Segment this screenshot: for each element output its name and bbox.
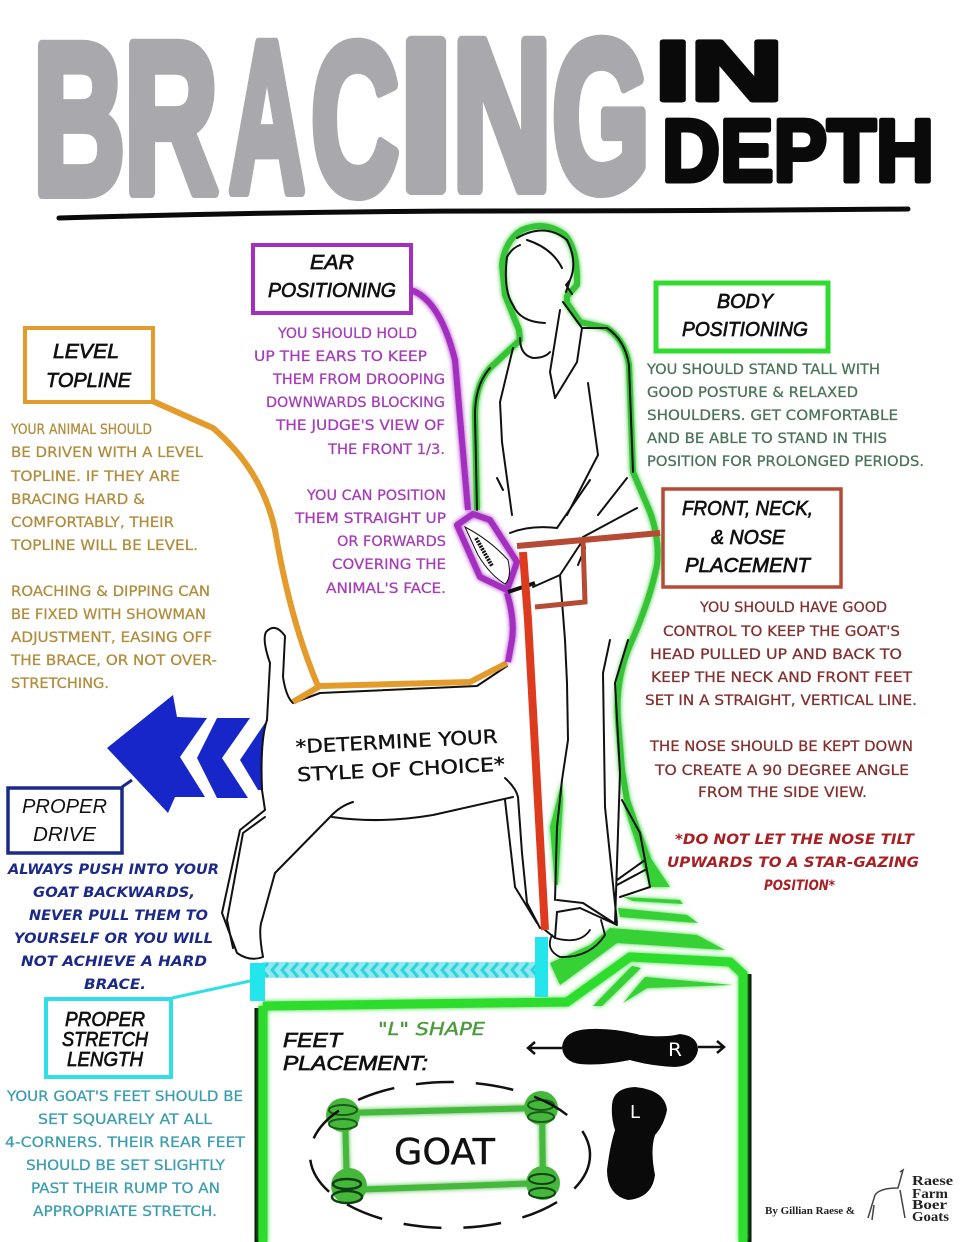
front right foot [524,1091,558,1125]
ear positioning heading box: POSITIONING [268,280,396,302]
head and hair [506,230,573,323]
level topline text: BE DRIVEN WITH A LEVEL [11,445,203,461]
front neck nose text: KEEP THE NECK AND FRONT FEET [651,670,912,686]
logo: Raese Farm Boer Goats: Farm [912,1187,948,1202]
stretch heading box: STRETCH [62,1029,148,1051]
dashed goat outline [310,1082,590,1228]
credit: By Gillian Raese & [765,1205,855,1217]
icon: right foot with arrows: R [668,1039,682,1061]
proper drive text: ALWAYS PUSH INTO YOUR [7,862,219,878]
shoe [550,920,605,957]
level topline text: YOUR ANIMAL SHOULD [10,422,152,438]
body positioning heading box: BODY [717,291,775,313]
stretch text: SHOULD BE SET SLIGHTLY [26,1158,225,1174]
ear positioning text: UP THE EARS TO KEEP [254,349,427,365]
ear positioning text: THEM FROM DROOPING [272,372,445,388]
determine your style note [295,726,505,786]
L shape label: "L" SHAPE [378,1019,486,1040]
proper drive text [7,862,219,993]
ear positioning text: THE JUDGE'S VIEW OF [275,418,445,434]
panel outline: feet placement frame [257,957,749,1242]
proper drive text: NEVER PULL THEM TO [29,908,208,924]
ear positioning text: COVERING THE [332,557,446,573]
panel: front neck and nose placement [645,489,919,894]
title: BRACING: N [452,0,552,235]
stretch heading box [46,999,171,1077]
level topline text: BE FIXED WITH SHOWMAN [11,607,206,623]
title: BRACING: C [311,0,399,239]
stretch heading box: LENGTH [67,1049,144,1071]
title: BRACING: R [124,0,218,238]
arrow: proper drive direction [107,695,270,813]
icon: left foot [607,1087,667,1200]
connector: body positioning [580,319,655,325]
ear positioning text: YOU CAN POSITION [306,488,446,504]
person green outline [475,226,658,860]
panel: proper stretch length [5,999,246,1220]
level topline heading box [25,328,153,402]
ear positioning text: THE FRONT 1/3. [327,442,445,458]
proper drive text: YOURSELF OR YOU WILL [14,931,213,947]
front neck nose text: YOU SHOULD HAVE GOOD [699,600,887,616]
stretch text: YOUR GOAT'S FEET SHOULD BE [6,1089,243,1105]
proper drive text: GOAT BACKWARDS, [33,885,195,901]
proper drive heading box: PROPER [22,796,107,818]
front neck nose text: THE NOSE SHOULD BE KEPT DOWN [649,739,913,755]
proper drive heading box: DRIVE [33,824,97,846]
body positioning text: AND BE ABLE TO STAND IN THIS [647,431,887,447]
icon: left foot: L [630,1102,640,1123]
star-gazing warning: UPWARDS TO A STAR-GAZING [667,855,919,871]
ear positioning heading box: EAR [310,252,354,274]
stretch text: APPROPRIATE STRETCH. [33,1204,217,1220]
level topline text: ROACHING & DIPPING CAN [11,584,210,600]
stretch text: PAST THEIR RUMP TO AN [31,1181,220,1197]
rear right foot [526,1166,560,1200]
collar and neckline [520,302,582,398]
body positioning text: SHOULDERS. GET COMFORTABLE [647,408,898,424]
title: BRACING: I [398,0,454,235]
goat body outline [222,628,538,960]
level topline text: TOPLINE WILL BE LEVEL. [10,538,198,554]
ear positioning text: ANIMAL'S FACE. [326,581,446,597]
logo: Raese Farm Boer Goats [868,1170,953,1225]
body positioning heading box [656,283,828,351]
proper drive text: BRACE. [84,977,146,993]
jaw and hand [510,480,637,640]
panel: body positioning [646,283,924,470]
stretch text: SET SQUARELY AT ALL [38,1112,212,1128]
body positioning text: YOU SHOULD STAND TALL WITH [646,362,880,378]
feet placement heading: FEET [283,1030,344,1052]
title: IN DEPTH: IN [655,24,783,118]
title: IN DEPTH [655,24,934,200]
title: IN DEPTH: DEPTH [662,101,934,200]
front neck nose heading box: FRONT, NECK, [682,498,813,520]
level topline text: COMFORTABLY, THEIR [11,515,174,531]
front neck nose heading box: PLACEMENT [685,555,812,577]
front neck nose text: TO CREATE A 90 DEGREE ANGLE [654,763,909,779]
front neck nose heading box [663,489,841,587]
level topline text: ADJUSTMENT, EASING OFF [11,630,212,646]
front neck nose text [645,600,917,801]
stretch text: 4-CORNERS. THEIR REAR FEET [5,1135,246,1151]
proper drive text: NOT ACHIEVE A HARD [21,954,207,970]
title: BRACING: G [552,0,650,236]
level topline heading box: TOPLINE [46,370,132,392]
body positioning heading box: POSITIONING [682,319,808,341]
rear left foot [331,1168,367,1204]
body positioning text [646,362,924,470]
determine your style note: STYLE OF CHOICE* [297,754,505,786]
panel: level topline [10,328,217,692]
front neck nose text: SET IN A STRAIGHT, VERTICAL LINE. [645,693,917,709]
panel: ear positioning [253,245,446,597]
goat label: GOAT [394,1132,496,1173]
title: BRACING: B [33,0,125,239]
logo: Raese Farm Boer Goats: Raese [912,1174,953,1189]
front neck nose text: CONTROL TO KEEP THE GOAT'S [663,624,900,640]
level topline text [10,422,217,692]
front neck nose text: HEAD PULLED UP AND BACK TO [650,647,902,663]
determine your style note: *DETERMINE YOUR [295,726,498,758]
trouser lines [555,640,568,900]
title: BRACING [33,0,650,239]
leader: ear positioning with ear [411,290,535,662]
star-gazing warning [667,832,919,894]
title: BRACING: A [229,0,305,237]
ear positioning text: OR FORWARDS [337,534,446,550]
front neck nose heading box: & NOSE [711,527,786,549]
diagram: goat foot rectangle [326,1091,560,1204]
goat black linework [222,628,540,959]
torso and arms [497,348,627,515]
body positioning text: POSITION FOR PROLONGED PERIODS. [647,454,924,470]
stretch text [5,1089,246,1220]
level topline text: THE BRACE, OR NOT OVER- [10,653,217,669]
cyan stretch bar [172,937,548,1001]
level topline text: STRETCHING. [11,676,109,692]
panel: proper drive [7,788,219,993]
ear positioning text [254,326,446,597]
title underline [59,209,908,218]
level topline heading box: LEVEL [53,341,119,363]
front left foot [326,1098,360,1132]
logo: Raese Farm Boer Goats: Goats [912,1210,950,1225]
star-gazing warning: POSITION* [764,878,836,894]
feet placement heading [283,1030,428,1075]
icon: right foot with arrows [528,1029,724,1067]
proper drive heading box [8,788,122,853]
ear positioning text: YOU SHOULD HOLD [277,326,417,342]
person black linework [475,230,650,957]
stretch heading box: PROPER [65,1009,145,1031]
feet placement heading: PLACEMENT: [283,1053,428,1075]
star-gazing warning: *DO NOT LET THE NOSE TILT [675,832,916,848]
ear positioning text: THEM STRAIGHT UP [294,511,446,527]
logo: Raese Farm Boer Goats: Boer [912,1198,947,1213]
front neck nose text: FROM THE SIDE VIEW. [698,785,867,801]
ear positioning heading box [253,245,411,313]
leader: level topline [150,400,507,702]
level topline text: TOPLINE. IF THEY ARE [10,469,180,485]
body positioning text: GOOD POSTURE & RELAXED [647,385,858,401]
decorative green stripes at feet [550,780,733,1006]
ear positioning text: DOWNWARDS BLOCKING [266,395,445,411]
level topline text: BRACING HARD & [11,492,145,508]
leader: front neck and nose red lines [517,533,660,930]
